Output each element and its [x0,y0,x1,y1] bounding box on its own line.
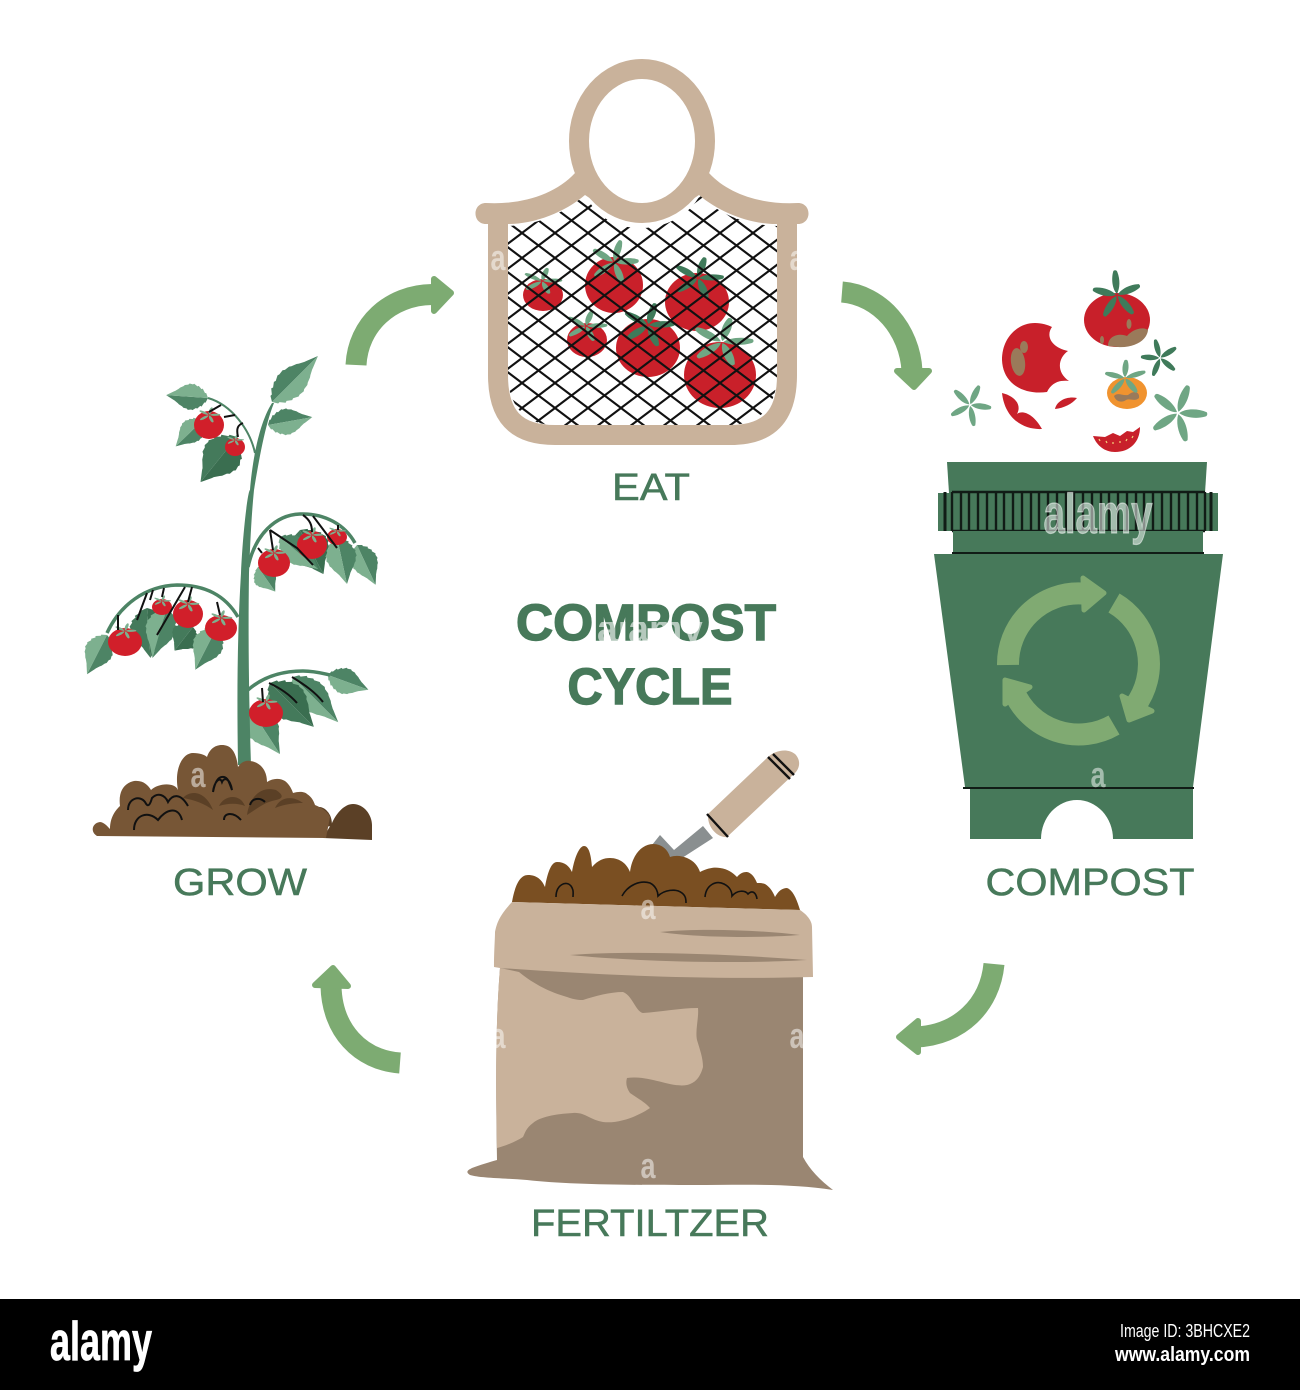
tomatoes on the plant [108,407,347,727]
watermark: small letters: a [790,1015,805,1056]
soil mound [93,745,372,840]
watermark: small letters: a [490,1015,506,1056]
arrow: grow to eat [356,279,451,365]
title [516,594,776,715]
watermark: small letters: a [490,237,506,278]
watermark: small letters: a [1090,754,1106,795]
label: fertilizer: FERTILTZER [531,1203,769,1245]
net [508,195,777,425]
leaves behind [74,345,388,763]
panel: compost bin [934,462,1223,839]
bin lid [947,462,1207,493]
bin body [934,554,1223,839]
title: CYCLE [568,658,732,715]
watermark: alamy on bin: alamy [1044,482,1152,545]
black fruit stems [118,405,338,703]
watermark: alamy over title: alamy [597,607,704,651]
trowel [652,750,799,865]
bin neck [953,531,1203,553]
label: compost: COMPOST [986,862,1194,904]
watermark: small letters: a [790,237,805,278]
panel: eat - string bag with tomatoes [476,69,808,435]
footer image id: Image ID: 3BHCXE2 [1120,1321,1250,1341]
arrow: fertilizer to grow [315,968,400,1063]
watermark: small letters: a [640,1145,656,1186]
tomato slice [1093,427,1140,452]
ribbed band [938,492,1218,531]
rotting tomato [1084,263,1150,347]
panel: fertilizer sack [467,750,833,1190]
sack body shadow [467,968,833,1190]
footer logo: alamy [50,1310,152,1372]
watermark: small letters [190,237,1106,1186]
bag frame [476,69,808,435]
footer bar [0,1299,1300,1390]
arrow: eat to compost [842,292,929,387]
panel: compost - food scraps [947,263,1210,452]
label: grow: GROW [173,862,307,904]
watermark: small letters: a [640,886,656,927]
sack folded top [494,902,813,978]
stem and branches [107,398,355,765]
watermark: small letters: a [190,754,206,795]
sack body light patch [496,968,703,1148]
orange rotten tomato [1102,355,1150,409]
tomato pieces [1002,393,1077,429]
tomatoes in the bag [523,239,756,408]
title: COMPOST [516,594,776,651]
footer url: www.alamy.com [1114,1344,1250,1366]
panel: grow - tomato plant [74,345,388,840]
icon: recycle arrows [1005,578,1152,734]
soil in sack [512,844,800,910]
bitten tomato [1002,323,1069,393]
leaf scraps [947,332,1210,444]
arrow: compost to fertilizer [899,964,994,1052]
label: eat: EAT [612,467,690,509]
